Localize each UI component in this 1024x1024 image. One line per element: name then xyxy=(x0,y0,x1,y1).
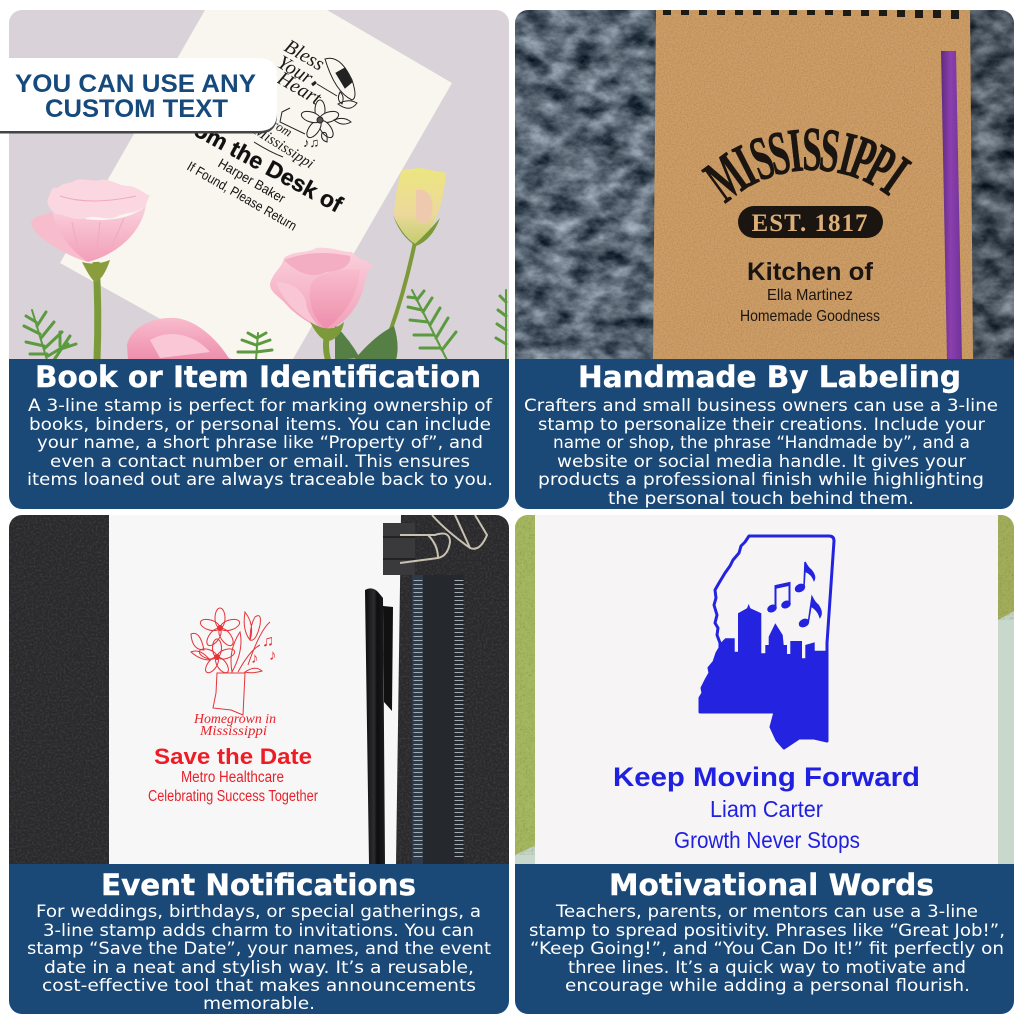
stamp: Mississippi arc: S xyxy=(762,117,796,189)
stamp: Mississippi arc: M xyxy=(692,140,759,215)
stamp logo: Bless Your Heart xyxy=(250,35,357,172)
description: Crafters and small business owners can use a 3-line xyxy=(524,396,998,415)
stamp logo: Bless Your Heart: from xyxy=(266,115,295,140)
description: memorable. xyxy=(203,994,315,1013)
flower: yellow bud xyxy=(390,168,446,332)
stamp: Mississippi arc: I xyxy=(785,115,806,185)
stamp text: Harper Baker xyxy=(216,156,288,206)
description: products a professional finish while highlighting xyxy=(538,470,984,489)
heading: Book or Item Identification xyxy=(35,360,481,394)
card with stamp xyxy=(60,10,452,359)
description: three lines. It’s a quick way to motivate and xyxy=(568,958,966,977)
stamp text: Ella Martinez xyxy=(767,287,853,304)
caption band xyxy=(9,359,509,509)
stamp: Mississippi arc: S xyxy=(741,122,783,194)
paper xyxy=(535,515,998,865)
caption band xyxy=(9,864,509,1014)
stamp logo: Bless Your Heart: Your xyxy=(274,51,317,89)
callout: you can use any custom text: YOU CAN USE ANY xyxy=(15,70,256,98)
stamp: Mississippi arc: I xyxy=(724,131,767,199)
stamp text xyxy=(148,712,318,805)
stamp text: Save the Date xyxy=(154,744,312,769)
description: 3-line stamp adds charm to invitations. You can xyxy=(43,921,474,940)
description: your name, a short phrase like “Property of”, and xyxy=(37,433,483,452)
description: date in a neat and stylish way. It’s a reusable, xyxy=(44,958,474,977)
stamp: Mississippi arc: P xyxy=(855,131,907,202)
flower: pink left xyxy=(31,179,150,360)
caption band xyxy=(515,864,1014,1014)
heading: Motivational Words xyxy=(609,868,934,902)
leaves at foot xyxy=(335,325,398,360)
flower: pink centre xyxy=(270,248,373,360)
photo: paper with pen and ruler xyxy=(9,515,509,865)
stamp text: Kitchen of xyxy=(747,258,874,286)
panel: event notifications xyxy=(9,515,509,1014)
description: items loaned out are always traceable back to you. xyxy=(27,470,493,489)
stamp logo: Bless Your Heart: ♪♫ xyxy=(303,135,319,150)
stamp text: Keep Moving Forward xyxy=(613,762,920,792)
stamp: Mississippi arc: I xyxy=(871,143,922,208)
binder clips xyxy=(383,515,487,575)
description: even a contact number or email. This ensures xyxy=(50,452,470,471)
flower: pink bottom xyxy=(127,318,230,360)
description: stamp to personalize their creations. Include your xyxy=(538,415,985,434)
panel: book or item identification xyxy=(9,10,509,509)
stamp logo: Bless Your Heart: Bless xyxy=(280,35,328,76)
description: For weddings, birthdays, or special gatherings, a xyxy=(36,902,481,921)
stamp text xyxy=(741,262,880,321)
stamp: floral bouquet logo: ♫ xyxy=(262,633,274,650)
heading: Event Notifications xyxy=(101,868,416,902)
stamp: floral bouquet logo: ♪ xyxy=(251,650,258,667)
callout: you can use any custom text: CUSTOM TEXT xyxy=(45,95,228,123)
stamp text: Liam Carter xyxy=(710,796,823,822)
stamp: Mississippi arc: P xyxy=(841,122,886,194)
description: encourage while adding a personal flourish. xyxy=(565,976,970,995)
pencil xyxy=(941,51,962,360)
ferns xyxy=(24,290,506,360)
stamp text xyxy=(613,762,920,853)
notebook xyxy=(653,10,973,360)
stamp text: Mississippi xyxy=(199,724,267,739)
heading: Handmade By Labeling xyxy=(578,360,961,394)
description: “Keep Going!”, and “You Can Do It!” fit perfectly on xyxy=(530,939,1004,958)
stamp: EST. 1817 pill: EST. 1817 xyxy=(752,210,868,237)
description xyxy=(529,902,1005,995)
description: name or shop, the phrase “Handmade by”, and a xyxy=(553,433,970,452)
icon: music notes xyxy=(767,562,821,628)
stamp text: from the Desk of xyxy=(175,108,347,218)
description: the personal touch behind them. xyxy=(608,489,914,508)
photo: kraft notebook on stone xyxy=(515,10,1014,360)
description xyxy=(27,902,492,1013)
pen xyxy=(365,588,393,864)
stamp text xyxy=(187,134,345,231)
paper xyxy=(109,515,401,865)
description: stamp to spread positivity. Phrases like “Great Job!”, xyxy=(529,921,1005,940)
stamp text: If Found, Please Return xyxy=(184,159,299,234)
stamp text: Homegrown in xyxy=(193,712,276,727)
stamp: EST. 1817 pill xyxy=(738,206,883,238)
description: A 3-line stamp is perfect for marking ownership of xyxy=(28,396,493,415)
stamp text: Celebrating Success Together xyxy=(148,788,318,805)
stamp: Mississippi arc: S xyxy=(816,115,844,186)
stamp: Mississippi arc: I xyxy=(833,118,862,189)
stamp logo: Bless Your Heart: Mississippi xyxy=(250,122,317,172)
description xyxy=(27,396,493,489)
description xyxy=(524,396,998,508)
description: stamp “Save the Date”, your names, and the event xyxy=(27,939,492,958)
stamp logo: Bless Your Heart: Heart xyxy=(273,67,325,110)
description: Teachers, parents, or mentors can use a 3-line xyxy=(555,902,978,921)
ruler xyxy=(412,575,464,865)
stamp text: Homemade Goodness xyxy=(740,308,880,325)
caption band xyxy=(515,359,1014,509)
stamp: Mississippi arc xyxy=(701,128,912,204)
description: website or social media handle. It gives your xyxy=(557,452,966,471)
description: cost-effective tool that makes announcements xyxy=(42,976,476,995)
stamp: floral bouquet logo: ♪ xyxy=(269,647,276,664)
stamp: Mississippi arc: S xyxy=(802,114,822,184)
stamp text: Metro Healthcare xyxy=(181,769,284,786)
stamp: floral bouquet logo xyxy=(191,608,276,715)
callout: you can use any custom text xyxy=(0,58,277,134)
stamp text: Growth Never Stops xyxy=(674,827,860,853)
panel: motivational words xyxy=(515,515,1014,1014)
description: books, binders, or personal items. You can include xyxy=(29,415,491,434)
stamp: Mississippi state with skyline xyxy=(695,536,834,750)
photo: pink flowers and stamped card xyxy=(9,10,509,360)
spiral binding xyxy=(663,10,959,19)
green textured cover xyxy=(515,515,1014,855)
panel: handmade by labeling xyxy=(515,10,1014,509)
photo: blue stamp on white paper xyxy=(515,515,1014,865)
